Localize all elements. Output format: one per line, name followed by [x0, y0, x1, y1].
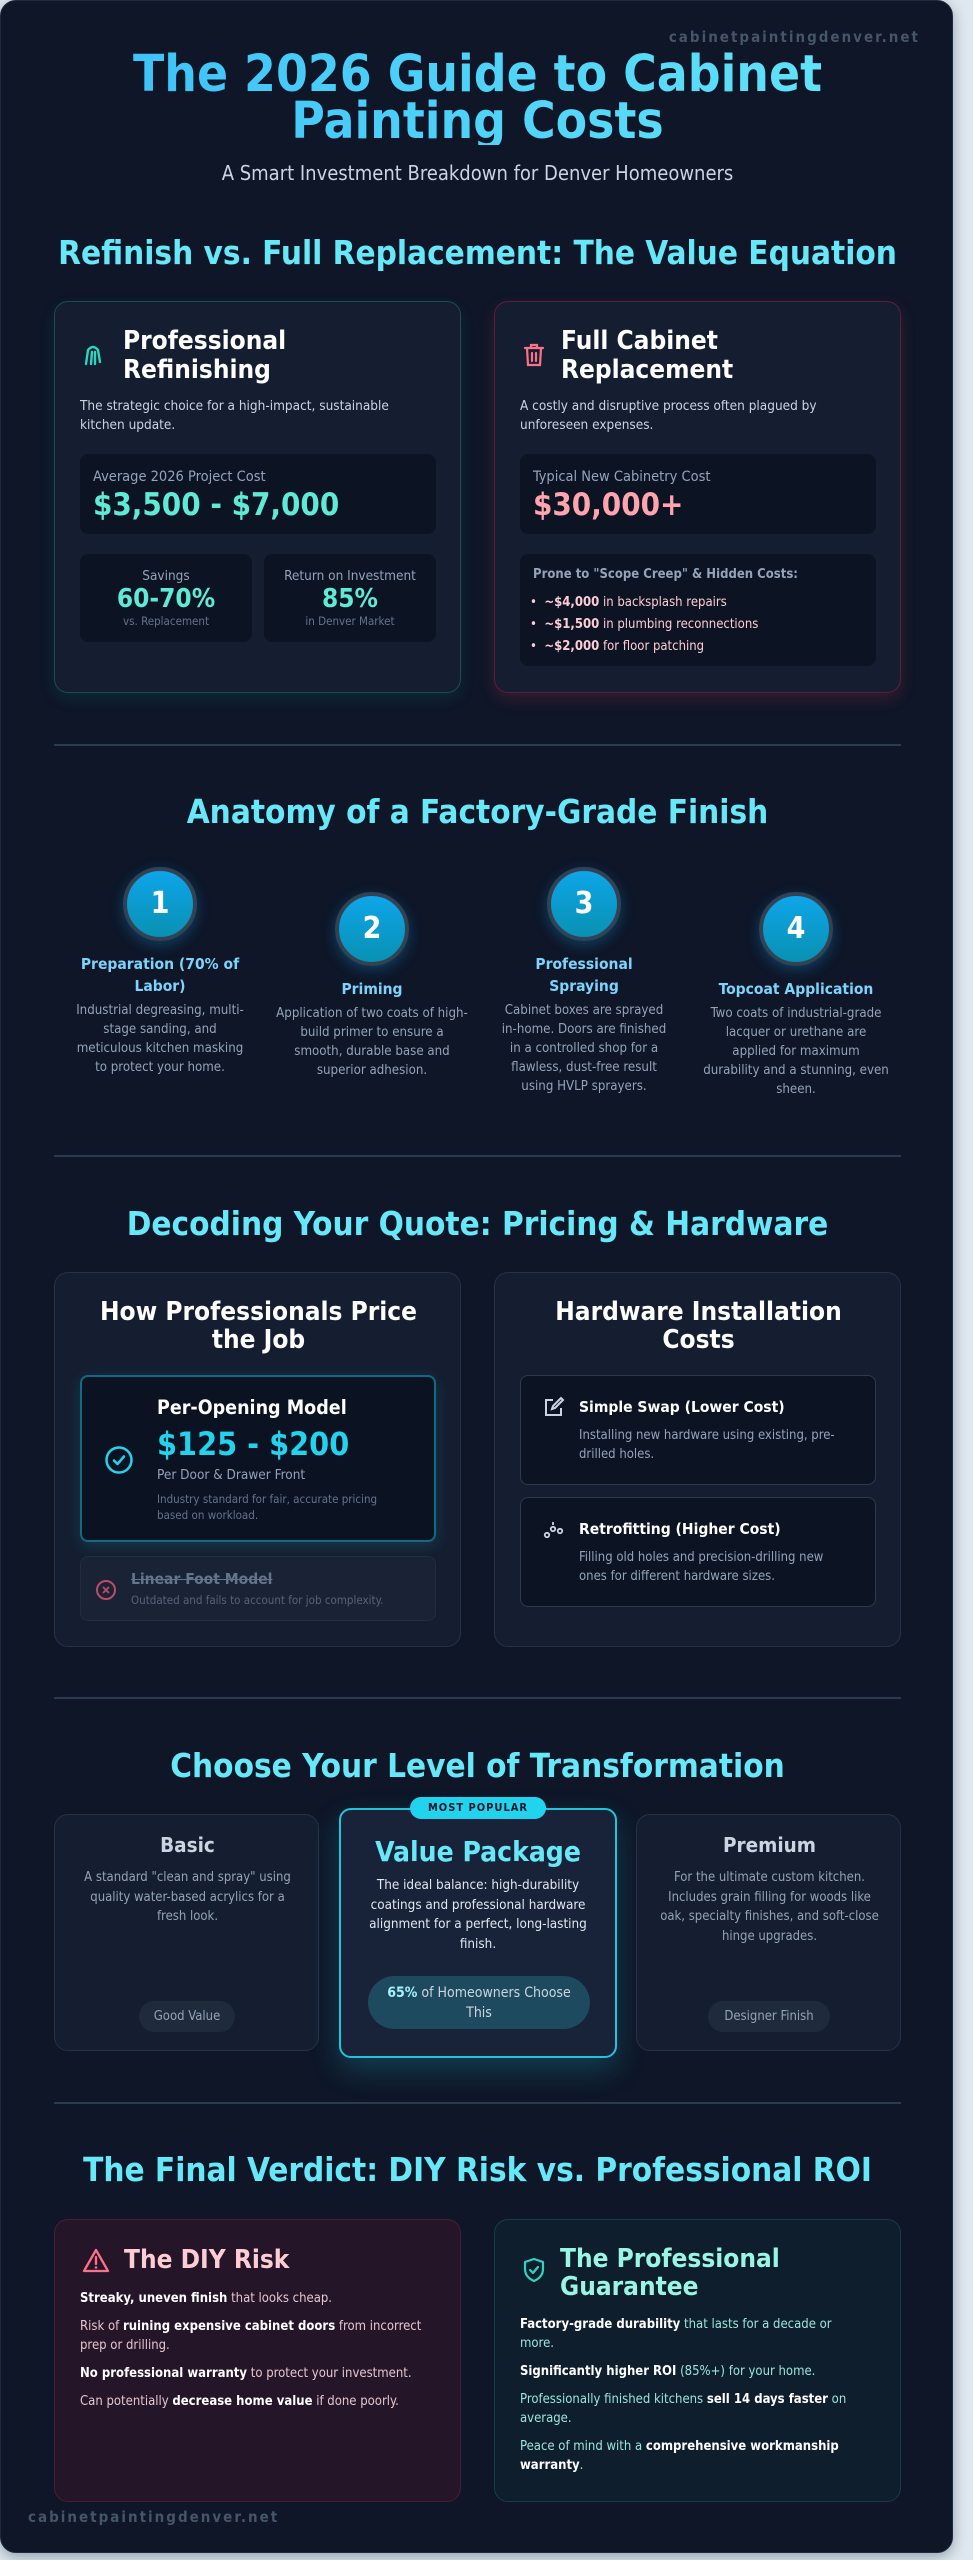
pill: Good Value: [154, 2009, 220, 2024]
tier: value package: [339, 1808, 617, 2058]
title: [1, 51, 954, 145]
panel: hardware: [494, 1272, 901, 1647]
step 1: [76, 864, 244, 1075]
hidden costs list: • ~$2,000 for floor patching: [530, 639, 704, 654]
panel: full replacement: [494, 301, 901, 693]
panel: professional guarantee: Guarantee: [560, 2272, 699, 2302]
panel: professional guarantee: Peace of mind with a comprehensive workmanship warranty.: [520, 2439, 839, 2473]
panel: diy risk: Streaky, uneven finish that looks cheap.: [80, 2291, 332, 2306]
heading: choose level: Choose Your Level of Transformation: [170, 1746, 785, 1785]
cost box: [80, 454, 436, 534]
icon: drill holes: [544, 1522, 564, 1538]
heading: Professional: [123, 326, 286, 356]
panel: professional guarantee: Factory-grade durability that lasts for a decade or more.: [520, 2317, 832, 2351]
simple swap: Installing new hardware using existing, pre-drilled holes.: [579, 1428, 835, 1462]
tier: basic: Basic: [160, 1833, 215, 1857]
heading: [123, 326, 286, 385]
heading: Full Cabinet: [561, 326, 718, 356]
cost box: Average 2026 Project Cost: [93, 469, 266, 485]
pill: [708, 2001, 830, 2032]
heading: Refinishing: [123, 355, 271, 385]
panel: diy risk: Risk of ruining expensive cabinet doors from incorrect prep or drilling.: [80, 2319, 421, 2353]
icon: brush: [84, 346, 102, 366]
panel: professional guarantee: Significantly higher ROI (85%+) for your home.: [520, 2364, 815, 2379]
simple swap: Simple Swap (Lower Cost): [579, 1398, 785, 1416]
step 3: 3: [575, 886, 593, 921]
panel: diy risk: Can potentially decrease home value if done poorly.: [80, 2394, 399, 2409]
steps: [76, 864, 889, 1097]
simple swap: [520, 1375, 876, 1485]
stat: savings: Savings: [142, 568, 190, 584]
heading: final verdict: The Final Verdict: DIY Risk vs. Professional ROI: [83, 2150, 872, 2189]
cost box: $3,500 - $7,000: [93, 487, 339, 523]
description: The strategic choice for a high-impact, sustainable kitchen update.: [80, 398, 389, 433]
retrofitting: [520, 1497, 876, 1607]
step 4: 4: [787, 911, 805, 946]
icon: shield: [524, 2258, 544, 2282]
icon: trash: [524, 344, 544, 366]
step 3: [502, 864, 666, 1094]
tier: value package: The ideal balance: high-durability coatings and professional hardware alignment for a perfect, long-lasting finish.: [369, 1878, 587, 1952]
hidden costs list: • ~$4,000 in backsplash repairs: [530, 595, 727, 610]
hidden costs list: [520, 554, 876, 666]
cost box: $30,000+: [533, 487, 683, 523]
hidden costs list: Prone to "Scope Creep" & Hidden Costs:: [533, 567, 798, 582]
cost box: [520, 454, 876, 534]
watermark top: cabinetpaintingdenver.net: [669, 28, 920, 46]
tier: premium: [636, 1814, 901, 2051]
panel: professional guarantee: The Professional: [560, 2244, 780, 2274]
heading: Replacement: [561, 355, 733, 385]
icon: check: [105, 1446, 133, 1474]
tier: basic: A standard "clean and spray" using quality water-based acrylics for a fresh look.: [84, 1870, 291, 1924]
heading: anatomy: Anatomy of a Factory-Grade Finish: [187, 792, 768, 831]
heading: decoding quote: Decoding Your Quote: Pricing & Hardware: [127, 1204, 828, 1243]
tier: value package: Value Package: [375, 1835, 581, 1868]
cost box: Typical New Cabinetry Cost: [533, 469, 711, 485]
heading: [561, 326, 733, 385]
pill: Designer Finish: [724, 2009, 814, 2024]
tier: basic: [54, 1814, 319, 2051]
pill: 65% of Homeowners Choose This: [387, 1985, 571, 2021]
step 3: Cabinet boxes are sprayed in-home. Doors are finished in a controlled shop for a flawless, dust-free result using HVLP sprayers.: [502, 1003, 666, 1094]
step 1: Preparation (70% of Labor): [81, 955, 239, 995]
stat: roi: [264, 554, 436, 642]
badge: MOST POPULAR: [428, 1801, 528, 1814]
retrofitting: Filling old holes and precision-drilling new ones for different hardware sizes.: [579, 1550, 823, 1584]
linear foot box: Outdated and fails to account for job complexity.: [131, 1593, 383, 1607]
stat: roi: 85%: [322, 584, 378, 614]
heading: refinish vs replacement: Refinish vs. Full Replacement: The Value Equation: [58, 233, 897, 272]
panel: diy risk: The DIY Risk: [124, 2245, 289, 2275]
step 1: 1: [151, 886, 169, 921]
heading: [100, 1297, 417, 1355]
pill: [368, 1976, 590, 2029]
stat: roi: in Denver Market: [305, 614, 395, 628]
heading: How Professionals Price: [100, 1297, 417, 1327]
step 1: Industrial degreasing, multi-stage sanding, and meticulous kitchen masking to protect your home.: [76, 1003, 244, 1075]
retrofitting: Retrofitting (Higher Cost): [579, 1520, 781, 1538]
heading: the Job: [212, 1325, 305, 1355]
per-opening box: Per Door & Drawer Front: [157, 1467, 305, 1483]
per-opening box: [80, 1375, 436, 1542]
description: A costly and disruptive process often plagued by unforeseen expenses.: [520, 398, 817, 433]
step 2: Priming: [341, 980, 403, 998]
panel: professional guarantee: Professionally finished kitchens sell 14 days faster on average.: [520, 2392, 846, 2426]
step 2: 2: [363, 911, 381, 946]
panel: pricing: [54, 1272, 461, 1647]
step 4: Two coats of industrial-grade lacquer or urethane are applied for maximum durability and a stunning, even sheen.: [703, 1006, 889, 1097]
icon: edit: [545, 1396, 564, 1416]
icon: warning: [82, 2248, 110, 2272]
panel: diy risk: No professional warranty to protect your investment.: [80, 2366, 412, 2381]
per-opening box: Per-Opening Model: [157, 1396, 347, 1419]
stat: savings: [80, 554, 252, 642]
heading: Costs: [662, 1325, 735, 1355]
linear foot box: [80, 1556, 436, 1621]
step 2: [276, 890, 468, 1078]
step 2: Application of two coats of high-build primer to ensure a smooth, durable base and superior adhesion.: [276, 1006, 468, 1078]
title: Painting Costs: [291, 92, 664, 151]
tier: premium: Premium: [723, 1833, 816, 1857]
step 3: Spraying: [549, 977, 619, 995]
pill: [139, 2001, 235, 2032]
hidden costs list: • ~$1,500 in plumbing reconnections: [530, 617, 758, 632]
icon: x: [96, 1580, 116, 1600]
stat: savings: 60-70%: [117, 584, 215, 614]
step 4: Topcoat Application: [719, 980, 873, 998]
stat: roi: Return on Investment: [284, 568, 416, 584]
panel: diy risk: [54, 2219, 461, 2502]
panel: professional guarantee: [494, 2219, 901, 2502]
watermark bottom: cabinetpaintingdenver.net: [28, 2508, 279, 2526]
step 4: [703, 890, 889, 1097]
title: The 2026 Guide to Cabinet: [133, 45, 822, 104]
per-opening box: $125 - $200: [157, 1425, 349, 1463]
panel: professional refinishing: [54, 301, 461, 693]
heading: Hardware Installation: [555, 1297, 842, 1327]
subtitle: A Smart Investment Breakdown for Denver Homeowners: [222, 161, 733, 185]
stat: savings: vs. Replacement: [123, 614, 209, 628]
heading: [555, 1297, 842, 1355]
per-opening box: Industry standard for fair, accurate pricing based on workload.: [157, 1492, 377, 1522]
tier: premium: For the ultimate custom kitchen. Includes grain filling for woods like oak, specialty finishes, and soft-close hinge upgrades.: [660, 1870, 879, 1944]
badge: [410, 1797, 546, 1819]
linear foot box: Linear Foot Model: [131, 1570, 272, 1588]
step 3: Professional: [535, 955, 633, 973]
